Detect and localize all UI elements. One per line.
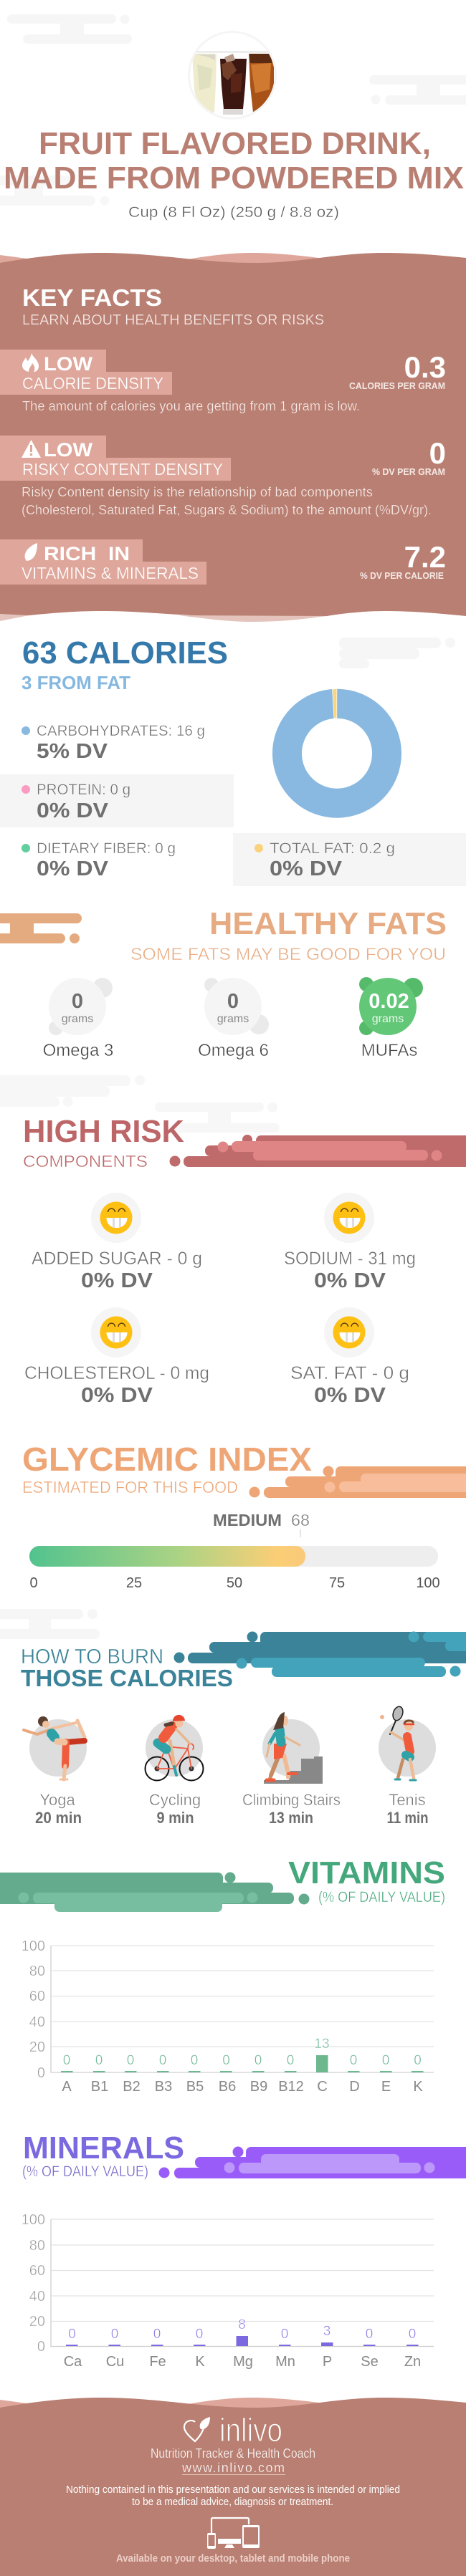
chart: glycemic bar xyxy=(29,1546,438,1567)
y axis labels: 60 xyxy=(29,1989,45,2004)
title: FRUIT FLAVORED DRINK, xyxy=(39,126,431,161)
subheading: minerals: (% OF DAILY VALUE) xyxy=(22,2163,148,2180)
decorative banner: healthy fats xyxy=(0,913,82,943)
text: risky content description: (Cholesterol, Saturated Fat, Sugars & Sodium) to the amount (%DV/gr). xyxy=(22,503,432,517)
x axis labels: B3 xyxy=(155,2079,172,2095)
icon: yoga figure xyxy=(24,1716,85,1779)
banner: high risk xyxy=(169,1135,466,1167)
text: tagline: Nutrition Tracker & Health Coach xyxy=(151,2446,315,2461)
heading: calories: 63 CALORIES xyxy=(22,635,228,671)
y axis labels xyxy=(22,2212,45,2355)
value labels: 0 xyxy=(63,2053,70,2068)
legend: total fat: 0% DV xyxy=(270,857,343,880)
legend: protein: 0% DV xyxy=(37,799,109,822)
glycemic scale labels xyxy=(29,1575,440,1591)
bars xyxy=(66,2336,419,2346)
legend: dietary fiber: DIETARY FIBER: 0 g xyxy=(37,840,176,857)
text: disclaimer: to be a medical advice, diagnosis or treatment. xyxy=(132,2496,333,2508)
banner: burn calories xyxy=(173,1632,466,1677)
stat: calories per gram: CALORIES PER GRAM xyxy=(349,380,445,391)
risk item: cholesterol xyxy=(24,1307,209,1407)
value labels: 0 xyxy=(222,2053,230,2068)
x axis labels: Se xyxy=(361,2354,379,2370)
footer panel xyxy=(0,2398,466,2576)
risk item: saturated fat xyxy=(290,1307,409,1407)
value labels: 0 xyxy=(255,2053,262,2068)
panel: key facts xyxy=(0,253,466,622)
risk item: added sugar: ADDED SUGAR - 0 g xyxy=(32,1249,202,1269)
legend: carbohydrates xyxy=(22,723,205,763)
x axis labels: B2 xyxy=(123,2079,141,2095)
badge: omega 3: Omega 3 xyxy=(43,1041,113,1060)
legend: total fat: TOTAL FAT: 0.2 g xyxy=(270,840,395,857)
wave: key facts bottom xyxy=(0,614,327,622)
tag: low risky content density: RISKY CONTENT DENSITY xyxy=(22,460,223,479)
bars xyxy=(61,2055,423,2072)
stat: dv per calorie: % DV PER CALORIE xyxy=(360,570,444,581)
activity: climbing stairs: Climbing Stairs xyxy=(242,1791,341,1809)
icon: cyclist xyxy=(145,1715,204,1781)
y axis labels: 80 xyxy=(29,1964,45,1979)
subheading: vitamins: (% OF DAILY VALUE) xyxy=(318,1889,445,1905)
x axis labels: K xyxy=(195,2354,205,2370)
decorative clouds: high risk xyxy=(0,1075,280,1133)
tag: low risky content density: LOW xyxy=(44,439,93,461)
risk item: saturated fat: SAT. FAT - 0 g xyxy=(290,1363,409,1383)
activity: yoga: 20 min xyxy=(35,1809,82,1827)
value labels: 0 xyxy=(196,2327,203,2342)
heading: healthy fats: HEALTHY FATS xyxy=(209,906,447,941)
value labels: 0 xyxy=(191,2053,198,2068)
value labels: 0 xyxy=(350,2053,357,2068)
badge: omega 6 xyxy=(198,978,269,1060)
badge: omega 6: Omega 6 xyxy=(198,1041,269,1060)
icon: stair climber xyxy=(264,1712,323,1784)
y axis labels: 100 xyxy=(22,2212,45,2228)
activity: climbing stairs xyxy=(242,1712,341,1827)
activity: yoga: Yoga xyxy=(39,1791,75,1809)
stat: calories per gram xyxy=(349,350,446,391)
decorative cloud: top right xyxy=(369,75,466,105)
risk item: cholesterol: CHOLESTEROL - 0 mg xyxy=(24,1363,209,1383)
icon: warning xyxy=(22,440,41,458)
title: MADE FROM POWDERED MIX xyxy=(4,160,464,196)
value labels: 0 xyxy=(95,2053,103,2068)
badge: MUFAs: 0.02 xyxy=(368,990,409,1013)
activity: cycling: Cycling xyxy=(149,1791,201,1809)
text: risky content description: Risky Content density is the relationship of bad components xyxy=(22,485,373,499)
panel background xyxy=(0,269,466,616)
badge: omega 6: grams xyxy=(217,1013,249,1025)
chart: minerals bar chart xyxy=(22,2212,434,2370)
x axis labels: Mn xyxy=(275,2354,295,2370)
value labels: 0 xyxy=(366,2327,373,2342)
wave: footer top xyxy=(0,2398,466,2576)
decorative cloud: beside title xyxy=(0,176,109,206)
decorative cloud: calories xyxy=(339,638,455,668)
subheading: estimated: ESTIMATED FOR THIS FOOD xyxy=(22,1478,238,1496)
x axis labels: P xyxy=(323,2354,332,2370)
heading: high risk: HIGH RISK xyxy=(23,1114,184,1149)
value labels: 0 xyxy=(153,2327,161,2342)
value labels: 0 xyxy=(159,2053,166,2068)
risk item: sodium: SODIUM - 31 mg xyxy=(284,1249,416,1269)
glycemic scale labels: 75 xyxy=(329,1575,345,1591)
y axis labels: 0 xyxy=(37,2065,45,2081)
text: disclaimer: Nothing contained in this presentation and our services is intended or implied xyxy=(66,2484,400,2496)
icon: flame xyxy=(22,353,39,372)
subheading: healthy fats: SOME FATS MAY BE GOOD FOR YOU xyxy=(130,945,446,964)
x axis labels: B5 xyxy=(186,2079,204,2095)
legend: carbohydrates: 5% DV xyxy=(37,740,108,763)
badge: omega 3: 0 xyxy=(72,990,83,1013)
icon: devices xyxy=(207,2518,260,2549)
text: disclaimer xyxy=(66,2484,400,2508)
x axis labels: C xyxy=(317,2079,328,2095)
x axis labels: B6 xyxy=(219,2079,236,2095)
x axis labels: Cu xyxy=(106,2354,124,2370)
heading: vitamins: VITAMINS xyxy=(288,1855,445,1890)
activity: climbing stairs: 13 min xyxy=(269,1809,313,1827)
chart: calorie donut xyxy=(287,689,387,803)
banner: glycemic index xyxy=(249,1466,466,1498)
stat: dv per gram: % DV PER GRAM xyxy=(372,466,445,477)
activity: tennis: 11 min xyxy=(387,1809,429,1827)
risk item: added sugar: 0% DV xyxy=(81,1269,153,1292)
y axis labels: 60 xyxy=(29,2263,45,2279)
food photo: three glasses xyxy=(188,31,277,120)
value labels: 0 xyxy=(111,2327,118,2342)
x axis labels: B1 xyxy=(91,2079,108,2095)
badge: omega 6: 0 xyxy=(227,990,239,1013)
risk item: saturated fat: 0% DV xyxy=(314,1384,386,1407)
heading: glycemic index: GLYCEMIC INDEX xyxy=(22,1441,312,1478)
chart: vitamins bar chart xyxy=(22,1938,434,2095)
legend: dietary fiber xyxy=(22,840,176,880)
decorative cloud: top left xyxy=(7,14,132,44)
stat: dv per gram: 0 xyxy=(429,436,446,470)
tag: rich in vitamins and minerals xyxy=(0,539,206,585)
glycemic scale labels: 50 xyxy=(227,1575,242,1591)
heading: key facts: KEY FACTS xyxy=(22,284,162,311)
text: availability: Available on your desktop, tablet and mobile phone xyxy=(116,2552,350,2565)
value labels: 0 xyxy=(68,2327,76,2342)
subheading: key facts: LEARN ABOUT HEALTH BENEFITS OR RISKS xyxy=(22,312,324,328)
y axis labels xyxy=(22,1938,45,2081)
risk item: added sugar xyxy=(32,1193,202,1292)
risk item: sodium: 0% DV xyxy=(314,1269,386,1292)
text: risky content description xyxy=(22,485,432,517)
activity: cycling: 9 min xyxy=(156,1809,194,1827)
heading: those calories: THOSE CALORIES xyxy=(21,1665,233,1691)
logo: inlivo xyxy=(184,2411,282,2448)
legend: protein xyxy=(22,782,130,822)
risk item: sodium xyxy=(284,1193,416,1292)
value labels xyxy=(68,2317,416,2342)
value labels: 0 xyxy=(281,2327,288,2342)
value labels: 0 xyxy=(414,2053,422,2068)
banner: minerals xyxy=(159,2146,466,2178)
banner: vitamins xyxy=(0,1873,310,1912)
legend box backgrounds xyxy=(0,774,466,886)
text: calorie density description: The amount of calories you are getting from 1 gram is low. xyxy=(22,399,360,413)
stat: dv per calorie: 7.2 xyxy=(404,540,446,574)
activity: tennis xyxy=(379,1705,436,1827)
badge: omega 3: grams xyxy=(62,1013,93,1025)
x axis labels: Ca xyxy=(64,2354,82,2370)
x axis labels xyxy=(62,2079,423,2095)
logo: inlivo: inlivo xyxy=(219,2411,282,2448)
title xyxy=(4,126,464,196)
glycemic scale labels: 0 xyxy=(29,1575,38,1591)
x axis labels xyxy=(64,2354,421,2370)
link: website: www.inlivo.com xyxy=(181,2461,285,2475)
value labels: 13 xyxy=(314,2037,330,2052)
glycemic scale labels: 100 xyxy=(416,1575,440,1591)
tag: rich in vitamins and minerals: RICH IN xyxy=(44,543,130,564)
y axis labels: 40 xyxy=(29,2014,45,2030)
value labels xyxy=(63,2037,422,2068)
stat: dv per gram xyxy=(372,436,446,477)
x axis labels: A xyxy=(62,2079,72,2095)
y axis labels: 20 xyxy=(29,2039,45,2055)
glycemic value label xyxy=(213,1511,310,1537)
stat: dv per calorie xyxy=(360,540,446,581)
decorative cloud: burn xyxy=(0,1609,100,1639)
tag: low calorie density: LOW xyxy=(44,353,93,375)
x axis labels: B9 xyxy=(250,2079,267,2095)
badge: omega 3 xyxy=(43,978,113,1060)
icon: heart with leaf xyxy=(184,2417,210,2441)
legend: protein: PROTEIN: 0 g xyxy=(37,782,130,798)
glycemic value label: MEDIUM xyxy=(213,1511,282,1529)
x axis labels: B12 xyxy=(278,2079,304,2095)
y axis labels: 20 xyxy=(29,2314,45,2330)
value labels: 0 xyxy=(287,2053,294,2068)
tag: low risky content density xyxy=(0,436,231,481)
value labels: 0 xyxy=(409,2327,416,2342)
x axis labels: K xyxy=(413,2079,423,2095)
y axis labels: 100 xyxy=(22,1938,45,1954)
activity: yoga xyxy=(24,1716,87,1827)
icon: leaf xyxy=(25,543,37,561)
x axis labels: Zn xyxy=(404,2354,421,2370)
glycemic scale labels: 25 xyxy=(126,1575,142,1591)
stat: calories per gram: 0.3 xyxy=(404,350,446,384)
value labels: 3 xyxy=(323,2324,331,2339)
y axis labels: 0 xyxy=(37,2339,45,2355)
heading: minerals: MINERALS xyxy=(23,2130,184,2166)
risk item: cholesterol: 0% DV xyxy=(81,1384,153,1407)
x axis labels: E xyxy=(381,2079,391,2095)
heading: how to burn: HOW TO BURN xyxy=(21,1645,163,1668)
serving size: Cup (8 Fl Oz) (250 g / 8.8 oz) xyxy=(128,204,339,221)
activity: cycling xyxy=(145,1715,204,1827)
tag: low calorie density xyxy=(0,350,172,395)
x axis labels: Mg xyxy=(233,2354,253,2370)
icon: tennis player xyxy=(380,1705,416,1780)
activity: tennis: Tenis xyxy=(389,1791,426,1809)
legend: carbohydrates: CARBOHYDRATES: 16 g xyxy=(37,723,205,739)
glycemic value label: 68 xyxy=(291,1511,310,1529)
y axis labels: 80 xyxy=(29,2238,45,2254)
value labels: 0 xyxy=(382,2053,389,2068)
subheading: components: COMPONENTS xyxy=(23,1152,148,1171)
tag: rich in vitamins and minerals: VITAMINS & MINERALS xyxy=(22,564,199,582)
tag: low calorie density: CALORIE DENSITY xyxy=(22,374,163,393)
badge: MUFAs: grams xyxy=(372,1013,404,1025)
x axis labels: Fe xyxy=(149,2354,166,2370)
x axis labels: D xyxy=(349,2079,360,2095)
legend: total fat xyxy=(255,840,395,880)
badge: MUFAs: MUFAs xyxy=(361,1041,417,1060)
value labels: 0 xyxy=(127,2053,134,2068)
wave: key facts top xyxy=(0,253,466,272)
value labels: 8 xyxy=(238,2317,246,2332)
subheading: calories from fat: 3 FROM FAT xyxy=(22,672,130,693)
legend: dietary fiber: 0% DV xyxy=(37,857,109,880)
badge: MUFAs xyxy=(359,977,423,1060)
y axis labels: 40 xyxy=(29,2289,45,2305)
